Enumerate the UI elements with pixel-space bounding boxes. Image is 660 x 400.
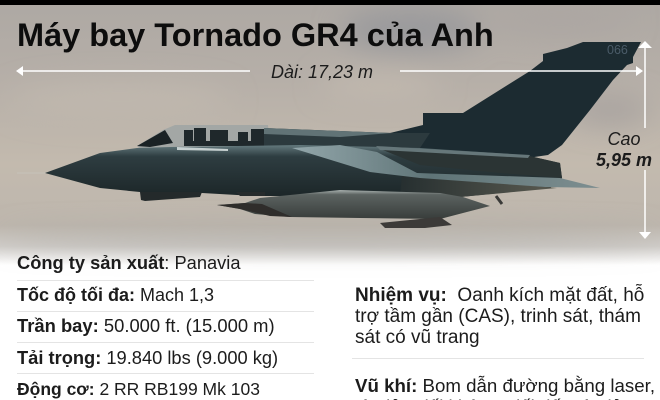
mission text xyxy=(355,284,644,348)
fuselage xyxy=(45,145,562,197)
engine nozzle xyxy=(378,148,562,178)
rear belly xyxy=(400,175,557,197)
mission text: Nhiệm vụ: Oanh kích mặt đất, hỗ xyxy=(355,285,644,306)
tail fin xyxy=(390,42,641,165)
height arrow xyxy=(638,41,652,239)
spine xyxy=(264,128,430,148)
spec: engine: Động cơ: 2 RR RB199 Mk 103 xyxy=(17,379,260,399)
height label: Cao xyxy=(607,129,641,149)
tail number: 066 xyxy=(607,43,628,57)
canopy xyxy=(137,125,270,149)
background terrain patches xyxy=(0,6,660,244)
spec: manufacturer: Công ty sản xuất: Panavia xyxy=(17,252,241,273)
weapons text: Vũ khí: Bom dẫn đường bằng laser, xyxy=(355,375,655,396)
top black bar xyxy=(0,0,660,5)
intake xyxy=(140,192,202,201)
height label: 5,95 m xyxy=(596,150,652,170)
mission text: trợ tầm gần (CAS), trinh sát, thám xyxy=(355,306,641,327)
fuel tank xyxy=(217,190,490,219)
spec: payload: Tải trọng: 19.840 lbs (9.000 kg) xyxy=(17,347,278,368)
wing xyxy=(292,145,600,188)
spec: ceiling: Trần bay: 50.000 ft. (15.000 m) xyxy=(17,315,275,336)
length arrow xyxy=(16,66,643,76)
highlights along the fuselage xyxy=(177,147,228,151)
length label: Dài: 17,23 m xyxy=(271,62,373,82)
height label xyxy=(596,129,652,170)
plane xyxy=(17,42,641,228)
mission text: sát có vũ trang xyxy=(355,327,480,348)
title: Máy bay Tornado GR4 của Anh xyxy=(17,17,494,53)
spec: max speed: Tốc độ tối đa: Mach 1,3 xyxy=(17,285,214,305)
